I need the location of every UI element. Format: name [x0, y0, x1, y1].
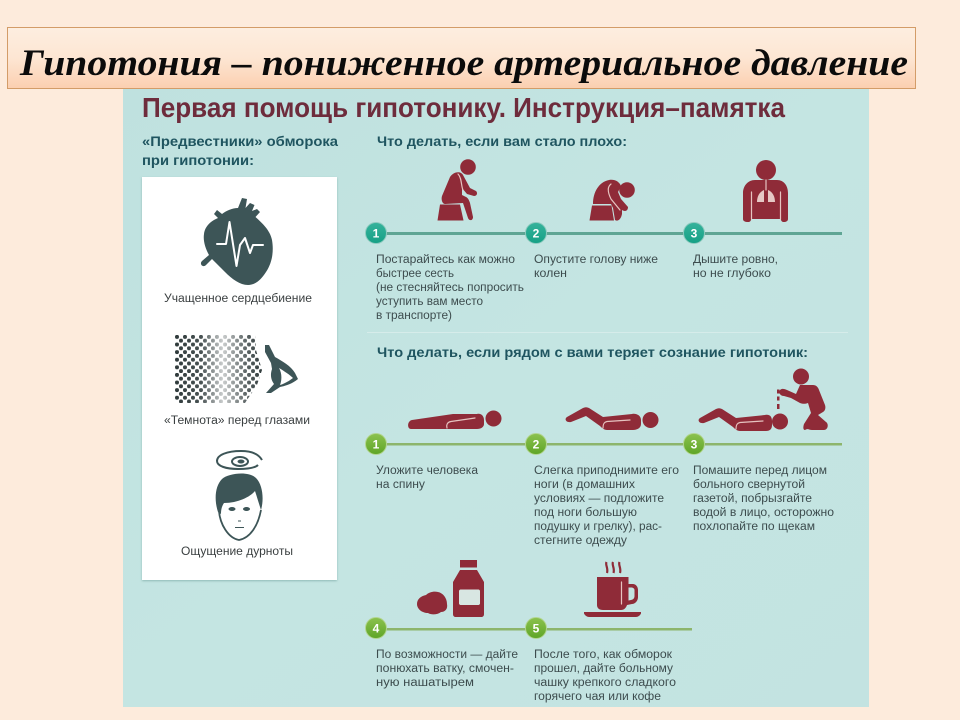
step marker 3: 3	[691, 438, 698, 452]
text: first-aid step 2	[534, 465, 679, 547]
heading: warning signs: «Предвестники» обморока	[142, 133, 338, 149]
icon: helper reviving person	[699, 368, 828, 431]
text: first-aid step 5: чашку крепкого сладкого	[534, 677, 676, 689]
text: self-help step 1: в транспорте)	[376, 310, 452, 322]
step marker 2	[526, 222, 546, 244]
step marker 4	[366, 618, 386, 638]
text: self-help step 1: быстрее сесть	[376, 268, 454, 280]
text: first-aid step 2: под ноги большую	[534, 507, 637, 519]
text: self-help step 3: Дышите ровно,	[693, 254, 778, 266]
step marker 5	[526, 618, 546, 638]
text: first-aid step 4: По возможности — дайте	[376, 649, 518, 661]
title banner	[8, 28, 916, 88]
panel: warning signs card	[142, 177, 337, 580]
sheet heading: Первая помощь гипотонику. Инструкция–памятка	[142, 92, 785, 123]
heading: if someone nearby faints: Что делать, если рядом с вами теряет сознание гипотоник:	[377, 344, 808, 360]
icon: person with legs raised	[566, 407, 658, 430]
icon: cotton and ammonia bottle	[417, 560, 484, 617]
step marker 2: 2	[533, 226, 540, 240]
text: self-help step 1: Постарайтесь как можно	[376, 254, 515, 266]
text: first-aid step 4	[376, 649, 518, 689]
label: palpitations: Учащенное сердцебиение	[164, 293, 312, 305]
text: first-aid step 1	[376, 465, 479, 491]
icon: person lying flat	[408, 410, 502, 429]
text: first-aid step 3: газетой, побрызгайте	[693, 493, 812, 505]
step marker 3: 3	[691, 226, 698, 240]
icon: person sitting	[438, 159, 477, 220]
heading: warning signs	[142, 133, 338, 168]
step marker 5: 5	[533, 622, 540, 636]
text: first-aid step 5: После того, как обморок	[534, 649, 673, 661]
title: Гипотония – пониженное артериальное давление	[19, 43, 908, 84]
text: self-help step 1: (не стесняйтесь попросить	[376, 282, 524, 294]
text: first-aid step 2: стегните одежду	[534, 535, 627, 547]
text: self-help step 2: Опустите голову ниже	[534, 254, 658, 266]
text: self-help step 2: колен	[534, 268, 567, 280]
text: first-aid step 5: прошел, дайте больному	[534, 663, 673, 675]
text: self-help step 3: но не глубоко	[693, 268, 771, 280]
step marker 3	[684, 222, 704, 244]
icon: person head below knees	[590, 180, 635, 221]
text: first-aid step 1: Уложите человека	[376, 465, 479, 477]
timeline: self-help steps	[366, 222, 842, 244]
step marker 1: 1	[373, 438, 380, 452]
text: first-aid step 3: больного свернутой	[693, 479, 805, 491]
text: first-aid step 4: понюхать ватку, смочен-	[376, 663, 514, 675]
text: first-aid step 2: Слегка приподнимите его	[534, 465, 679, 477]
icon: dizzy head	[216, 451, 263, 540]
timeline: first-aid steps 4-5	[366, 618, 692, 638]
step marker 1	[366, 434, 386, 454]
step marker 2	[526, 434, 546, 454]
heading: warning signs: при гипотонии:	[142, 152, 254, 168]
text: first-aid step 5	[534, 649, 676, 703]
text: first-aid step 2: условиях — подложите	[534, 493, 664, 505]
label: darkness before eyes: «Темнота» перед глазами	[164, 415, 310, 427]
text: first-aid step 3	[693, 465, 834, 533]
text: self-help step 1	[376, 254, 524, 322]
step marker 2: 2	[533, 438, 540, 452]
step marker 4: 4	[373, 622, 380, 636]
step marker 1	[366, 222, 386, 244]
text: first-aid step 3: водой в лицо, осторожно	[693, 507, 834, 519]
step marker 3	[684, 434, 704, 454]
heading: if you feel unwell: Что делать, если вам стало плохо:	[377, 133, 627, 149]
text: first-aid step 4: ную нашатырем	[376, 677, 474, 689]
text: first-aid step 3: похлопайте по щекам	[693, 521, 815, 533]
text: first-aid step 2: ноги (в домашних	[534, 479, 635, 491]
icon: halftone darkness and eye	[175, 335, 298, 403]
timeline: first-aid steps 1-3	[366, 434, 842, 454]
text: first-aid step 1: на спину	[376, 479, 425, 491]
text: first-aid step 5: горячего чая или кофе	[534, 691, 661, 703]
text: first-aid step 3: Помашите перед лицом	[693, 465, 827, 477]
text: self-help step 3	[693, 254, 778, 280]
icon: hot cup on saucer	[584, 562, 641, 617]
text: first-aid step 2: подушку и грелку), рас-	[534, 521, 662, 533]
text: self-help step 1: уступить вам место	[376, 296, 483, 308]
step marker 1: 1	[373, 226, 380, 240]
icon: heart with pulse	[201, 198, 273, 285]
text: self-help step 2	[534, 254, 658, 280]
label: faintness: Ощущение дурноты	[181, 546, 293, 558]
icon: torso with lungs	[743, 160, 788, 222]
panel: instruction sheet	[123, 88, 869, 707]
